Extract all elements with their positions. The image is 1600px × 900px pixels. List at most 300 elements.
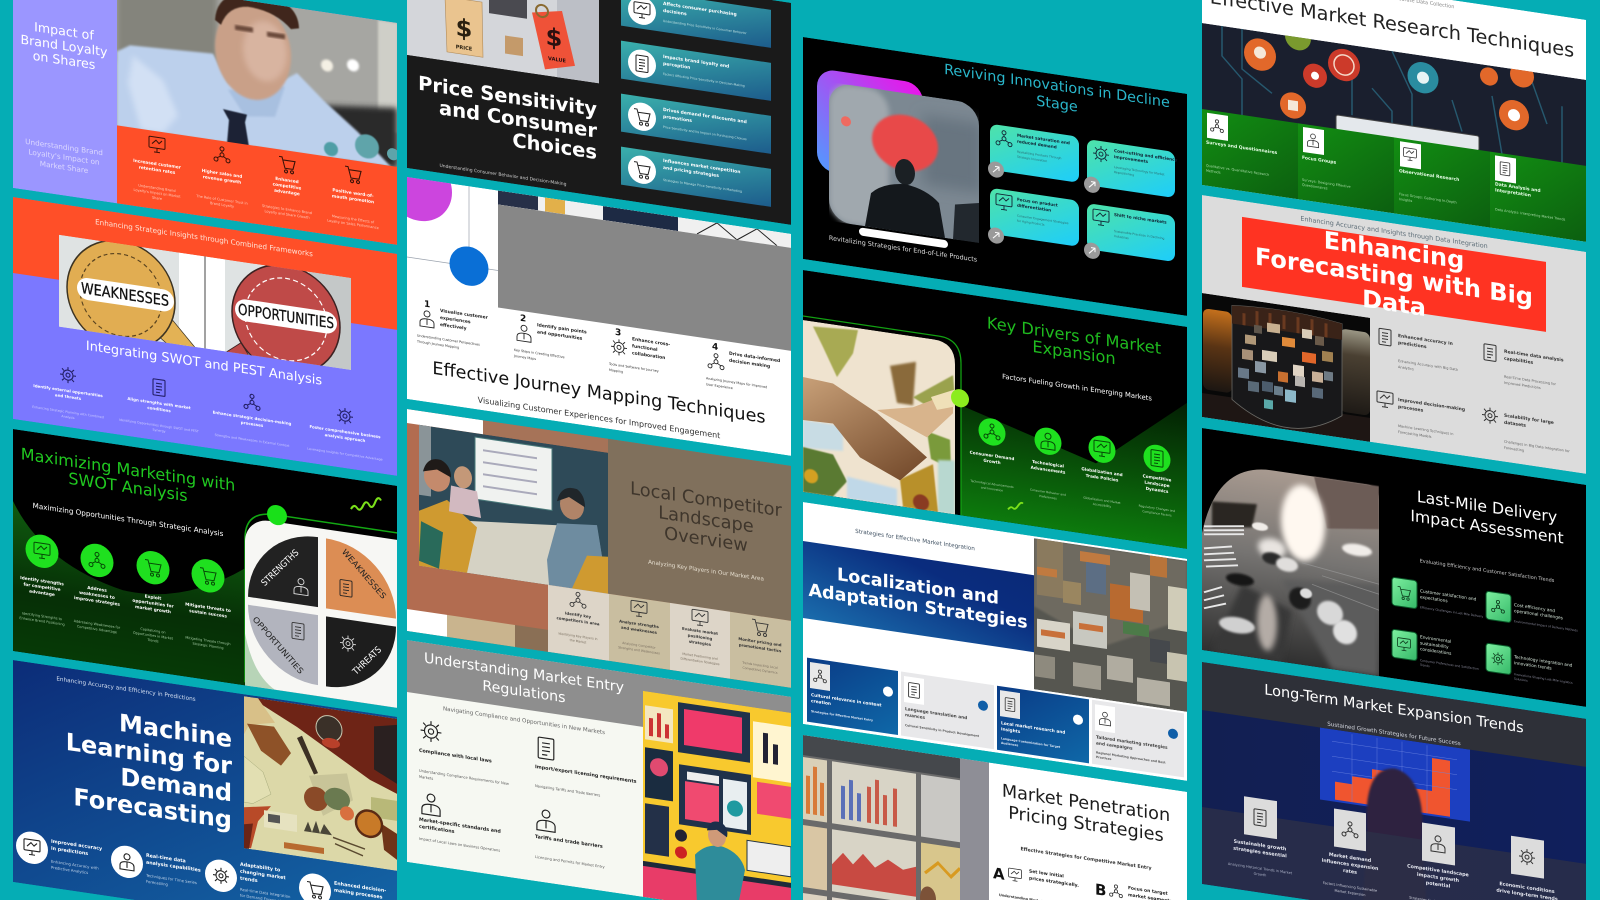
- image: woman viewing chart screen: [1320, 727, 1470, 900]
- card: tailored marketing: [1092, 700, 1184, 777]
- card: market competition: Influences market competition: [663, 159, 740, 175]
- item: globalization: Globalization and Market: [1083, 496, 1121, 505]
- slide: Local Competitor Landscape Overview: [407, 409, 791, 688]
- slide: Maximizing Marketing with SWOT Analysis: [13, 429, 397, 708]
- subtitle: Enhancing Accuracy and Insights through Data Integration: [1300, 215, 1488, 250]
- card: market saturation: reduced demand: [1017, 139, 1057, 150]
- item: customer satisfaction: expectations: [1420, 594, 1448, 604]
- item: technological advancements: [1030, 425, 1066, 502]
- card: identify competitors: Identifying Key Players in: [558, 631, 598, 641]
- item: market demand: Market demand: [1329, 853, 1371, 864]
- card: identify competitors: the Market: [570, 638, 587, 645]
- heading: Local Competitor: [630, 478, 782, 521]
- item: accuracy: [1379, 328, 1458, 378]
- card: purchasing decisions: Affects consumer purchasing: [663, 2, 737, 18]
- card: tailored marketing: and campaigns: [1096, 740, 1133, 752]
- item: identify strengths: [19, 531, 65, 627]
- card: market saturation: Market saturation and: [1017, 133, 1070, 145]
- step 1: Visualize customer: [440, 309, 488, 321]
- item: market demand: [1322, 807, 1379, 899]
- card: cultural relevance: Strategies for Effective Market Entry: [811, 709, 873, 722]
- item: comprehensive analysis: analysis approach: [325, 432, 366, 443]
- overlay: lower tint band: [1202, 807, 1586, 900]
- item: globalization: [1081, 433, 1123, 510]
- item: improved accuracy: Predictive Analytics: [51, 865, 88, 875]
- item: customer retention: Increased customer: [133, 159, 181, 171]
- item: standards: [419, 792, 501, 853]
- card: cost cutting: Repositioning: [1114, 170, 1134, 177]
- subtitle: Sustained Growth Strategies for Future Success: [1327, 722, 1461, 747]
- image: price and value tags: VALUE: [548, 56, 566, 65]
- card: niche markets: [1084, 203, 1175, 271]
- card: differentiation: [988, 187, 1079, 256]
- item: customer satisfaction: Efficiency Challenges in Last-Mile Delivery: [1420, 605, 1483, 619]
- item: competitive advantage: competitive: [273, 181, 301, 192]
- item: technology integration: innovation trends: [1514, 660, 1552, 672]
- card: market positioning: Differentiation Strategies: [680, 656, 720, 666]
- card: cultural relevance: Cultural relevance in content: [811, 693, 881, 709]
- card: niche markets: Industries: [1114, 234, 1129, 240]
- item: real-time data: [111, 846, 200, 886]
- item: real-time: Real-Time Data Processing for: [1504, 375, 1556, 386]
- item: market demand: influences expansion: [1322, 858, 1379, 872]
- item: technology integration: Solutions: [1514, 677, 1528, 683]
- item: adaptability: changing market: [240, 869, 286, 881]
- item: market demand: Factors Influencing Sustainable: [1323, 881, 1377, 893]
- item: address weaknesses: [74, 540, 121, 635]
- column: focus groups: Focus Groups: [1302, 155, 1336, 166]
- step 2: Journey Maps: [513, 354, 536, 361]
- accent: squiggle: [1008, 501, 1023, 512]
- item: competitive landscape: potential: [1426, 880, 1451, 890]
- item: consumer demand: [969, 415, 1014, 494]
- subtitle: Revitalizing Strategies for End-of-Life Products: [829, 234, 978, 264]
- image: price and value tags: [407, 0, 599, 84]
- accent: squiggle: [350, 497, 382, 511]
- image: charts on desk: [244, 696, 397, 871]
- card: market positioning: strategies: [689, 639, 712, 647]
- slide: Understanding Market Entry Regulations: [407, 640, 791, 900]
- heading: Impact of Brand Loyalty on Shares: Impact of: [34, 19, 94, 43]
- image: man facing glowing brain: [829, 84, 979, 243]
- item: decision making: [213, 394, 292, 447]
- card: analyze strengths: Analyze strengths: [619, 618, 659, 629]
- card: discounts: promotions: [663, 114, 692, 124]
- item: comprehensive analysis: [308, 408, 382, 461]
- slide: Last-Mile Delivery Impact Assessment: [1202, 428, 1586, 707]
- column: focus groups: [1298, 123, 1394, 213]
- slide: Effective Market Research Techniques: [1202, 0, 1586, 242]
- item: set low prices: Set low initial: [1029, 869, 1064, 880]
- item: licensing: [535, 737, 637, 803]
- item: technological advancements: Advancements: [1031, 465, 1066, 475]
- accent: blue circle: [450, 244, 488, 289]
- column: focus groups: Questionnaires: [1302, 183, 1328, 191]
- step 1: experiences: [440, 315, 471, 325]
- heading: Understanding Market Entry: [424, 651, 624, 696]
- slide: Integrating SWOT and PEST Analysis: [13, 197, 397, 476]
- item: improved accuracy: [16, 832, 102, 874]
- heading: Localization and: [837, 565, 999, 609]
- block: red title background: [1242, 217, 1546, 332]
- item: real-time data: Techniques for Time Series: [146, 873, 197, 885]
- step 4: Drive data-informed: [729, 352, 780, 364]
- card: local market research: Language Customization for Target: [1001, 736, 1060, 749]
- step 3: collaboration: [632, 350, 665, 361]
- item: cost efficiency: operational challenges: [1514, 608, 1564, 622]
- item: real-time: Improved Predictions: [1504, 381, 1541, 390]
- item: competitive advantage: advantage: [274, 188, 300, 197]
- card: identify competitors: competitors in area: [557, 615, 600, 627]
- image: patterned strip: [498, 190, 791, 248]
- subtitle: Factors Fueling Growth in Emerging Markets: [1002, 373, 1152, 403]
- item: customer retention: Share: [152, 196, 162, 201]
- item: address weaknesses: Address: [87, 586, 107, 594]
- band: dark title header: [1202, 662, 1586, 767]
- subtitle: Navigating Compliance and Opportunities in New Markets: [443, 706, 605, 736]
- item: customer retention: Loyalty's Impact on Market: [133, 188, 181, 199]
- item: consumer demand: and Innovation: [981, 485, 1003, 493]
- blocks: bottom colour strips: [407, 609, 548, 652]
- card: cost cutting: Cost-cutting and efficiency: [1114, 148, 1177, 162]
- column: data analysis: Data Analysis and: [1495, 182, 1541, 194]
- item: economic conditions: [1496, 834, 1558, 900]
- item: competitive dynamics: Landscape: [1144, 480, 1170, 488]
- item: environmental sustainability: considerations: [1420, 646, 1452, 657]
- step 1: Understanding Customer Perspectives: [417, 333, 480, 347]
- item: scalability: Challenges in Big Data Integration for: [1504, 440, 1570, 453]
- item: sales growth: Higher sales and: [202, 169, 242, 180]
- heading: Key Drivers of Market: [987, 313, 1161, 358]
- step 4: decision making: [729, 358, 770, 370]
- card: niche markets: Sustainable Practices in Declining: [1114, 229, 1164, 240]
- card: differentiation: for Aging Products: [1017, 219, 1045, 227]
- band: gray header: [407, 640, 791, 749]
- subtitle: Understanding Consumer Behavior and Decision-Making: [439, 163, 567, 188]
- step 2: Identify pain points: [537, 323, 587, 336]
- image: price and value tags: $: [456, 13, 472, 44]
- step 3: Tools and Software for Journey: [609, 362, 659, 373]
- step 1: 1: [424, 300, 430, 310]
- item: decision making: processes: [241, 420, 264, 428]
- step 1: [416, 298, 489, 354]
- subtitle: Analyzing Key Players in Our Market Area: [648, 560, 764, 583]
- column: data analysis: Interpretation: [1495, 187, 1531, 199]
- item: decision making: processes: [1398, 404, 1424, 414]
- heading: Impact of Brand Loyalty on Shares: on Shares: [33, 48, 95, 72]
- column: observational research: Focus Groups: Gathering In-Depth: [1399, 192, 1457, 205]
- item: address weaknesses: Addressing Weaknesses for: [74, 619, 120, 630]
- panel: SWOT wheel: STRENGTHS: [260, 548, 301, 589]
- subtitle: Maximizing Opportunities Through Strategic Analysis: [33, 501, 224, 538]
- item: sales growth: revenue growth: [203, 174, 241, 186]
- item: external opportunities: and threats: [55, 392, 82, 401]
- card: niche markets: Shift to niche markets: [1114, 212, 1167, 225]
- item: accuracy: Analytics: [1398, 365, 1414, 371]
- step 2: 2: [520, 314, 526, 325]
- heading: Expansion: [1032, 337, 1116, 368]
- subtitle: Evaluating Efficiency and Customer Satisfaction Trends: [1420, 558, 1555, 584]
- item: consumer demand: Growth: [983, 458, 1001, 465]
- item: identify strengths: Enhance Brand Positioning: [19, 616, 65, 627]
- item: standards: certifications: [419, 824, 455, 835]
- step 3: functional: [632, 343, 658, 353]
- heading: Effective Journey Mapping Techniques: [432, 359, 766, 428]
- item: target segments: Focus on target: [1128, 886, 1168, 897]
- image: analyst with dashboards: [643, 691, 791, 900]
- item: exploit opportunities: Capitalizing on: [140, 627, 166, 635]
- item: align strengths: conditions: [147, 405, 171, 413]
- subtitle: Understanding Brand: [25, 137, 103, 157]
- card: cost cutting: improvements: [1114, 154, 1149, 164]
- card: brand loyalty: Impacts brand loyalty and: [663, 55, 729, 70]
- item: set low prices: prices strategically.: [1029, 875, 1079, 889]
- item: real-time: Real-time data analysis: [1504, 350, 1564, 363]
- item: customer retention: [134, 136, 181, 200]
- item: customer satisfaction: Customer satisfaction and: [1420, 589, 1476, 603]
- item: adaptability: Adaptability to: [240, 863, 280, 874]
- background: green curve: [13, 501, 245, 685]
- card: local market research: [997, 686, 1089, 763]
- item: real-time data: analysis capabilities: [146, 860, 201, 874]
- item: technological advancements: Consumer Behavior and: [1030, 488, 1066, 497]
- item: sales growth: [195, 143, 248, 211]
- item: decision making: [1377, 391, 1465, 444]
- item: standards: Market-specific standards and: [419, 818, 501, 835]
- label: weaknesses: WEAKNESSES: [81, 279, 169, 310]
- panel: SWOT wheel: WEAKNESSES: [339, 548, 388, 601]
- slide: Price Sensitivity and Consumer Choices: [407, 0, 791, 225]
- image: team meeting: [419, 424, 608, 594]
- card: discounts: Drives demand for discounts and: [663, 108, 747, 125]
- card: tailored marketing: Practices: [1096, 755, 1112, 761]
- step 1: effectively: [440, 322, 467, 332]
- item: standards: Impact of Local Laws on Business Operations: [419, 837, 500, 853]
- heading: Impact of Brand Loyalty on Shares: Brand Loyalty: [20, 32, 108, 60]
- item: competitive dynamics: Dynamics: [1146, 486, 1169, 494]
- band: blue title: [803, 541, 1034, 652]
- card: pricing tactics: promotional tactics: [739, 642, 782, 653]
- heading: Integrating SWOT and PEST Analysis: [86, 339, 322, 389]
- item: economic conditions: Economic conditions: [1499, 882, 1555, 895]
- item: competitive dynamics: Regulatory Changes and: [1139, 504, 1175, 513]
- image: technology circuit icons: [1202, 23, 1586, 166]
- image: handshake over map: [803, 320, 955, 514]
- card: pricing tactics: Trends Impacting Local: [742, 661, 778, 670]
- heading: Pricing Strategies: [1008, 802, 1164, 846]
- item: competitive advantage: Enhanced: [275, 177, 299, 185]
- card: market competition: [621, 147, 771, 207]
- item: accuracy: Enhanced accuracy in: [1398, 334, 1453, 347]
- background: green wedge: [961, 369, 1187, 549]
- subtitle: Market Share: [40, 159, 89, 175]
- slide: Impact of Brand Loyalty on Shares: [13, 0, 399, 245]
- item: sustainable growth: [1228, 794, 1293, 881]
- item: sustainable growth: Analyzing Historical Trends in Market: [1228, 862, 1292, 875]
- item: external opportunities: [32, 367, 104, 419]
- card: analyze strengths: Analyzing Competitor: [622, 641, 656, 650]
- accent: purple circle: [386, 150, 452, 226]
- slide: Effective Journey Mapping Techniques: [386, 150, 791, 456]
- item: improved accuracy: in predictions: [51, 846, 88, 857]
- slide: Key Drivers of Market Expansion: [803, 270, 1187, 550]
- item: identify strengths: advantage: [29, 588, 55, 598]
- item: sustainable growth: Growth: [1254, 872, 1266, 878]
- item: accuracy: Enhancing Accuracy with Big Data: [1398, 359, 1458, 372]
- item: customer satisfaction: [1392, 577, 1483, 619]
- item: competitive dynamics: Competitive: [1143, 473, 1171, 483]
- item: mitigate threats: [185, 556, 231, 651]
- card: local market research: Local market research and: [1001, 721, 1065, 736]
- card: pricing tactics: [730, 612, 791, 688]
- item: sustainable growth: strategies essential: [1233, 846, 1287, 860]
- item: sales growth: The Role of Customer Trust in: [196, 194, 248, 206]
- item: licensing: Navigating Tariffs and Trade Barriers: [535, 784, 600, 798]
- card: discounts: [621, 94, 771, 154]
- item: identify strengths: Identify strengths: [20, 576, 64, 588]
- card: identify competitors: [548, 585, 609, 661]
- card: analyze strengths: Strengths and Weaknesses: [618, 645, 660, 655]
- item: decision making: Strengths and Weaknesses in External Context: [215, 433, 290, 448]
- item: exploit opportunities: [132, 548, 174, 646]
- item: decision making: Forecasting Models: [1398, 430, 1432, 439]
- item: technology integration: Innovations Shaping Last-Mile Logistics: [1514, 672, 1573, 685]
- heading: Regulations: [482, 678, 566, 706]
- accent: lime dot: [951, 388, 969, 409]
- item: licensing: Import/export licensing requirements: [535, 764, 637, 785]
- item: real-time data: Real-time data: [146, 854, 186, 865]
- item: globalization: Trade Policies: [1086, 473, 1119, 483]
- slide: Long-Term Market Expansion Trends: [1202, 662, 1586, 900]
- strip: gray column: [960, 758, 989, 900]
- card: tailored marketing: Regional Marketing Approaches and Best: [1096, 750, 1166, 765]
- item: address weaknesses: Competitive Advantage: [77, 624, 117, 634]
- item: tariffs: Tariffs and trade barriers: [535, 834, 603, 850]
- item: identify strengths: for competitive: [23, 582, 61, 593]
- heading: Choices: [512, 129, 597, 164]
- item: external opportunities: Identify external opportunities: [33, 383, 103, 398]
- panel: SWOT wheel: [244, 513, 397, 708]
- item: accuracy: predictions: [1398, 340, 1427, 350]
- step 4: [706, 341, 780, 397]
- panel: brown title area: [608, 439, 791, 621]
- card: language translation: Cultural Sensitivity in Product Development: [905, 723, 980, 738]
- item: comprehensive analysis: Foster comprehensive business: [309, 424, 381, 439]
- item: competitive landscape: impacts growth: [1417, 872, 1460, 884]
- card: language translation: nuances: [905, 713, 925, 721]
- item: competitive landscape: [1407, 820, 1470, 900]
- item: compliance: Markets: [419, 775, 433, 781]
- image: price and value tags: PRICE: [456, 44, 473, 53]
- item: exploit opportunities: market growth: [135, 604, 171, 615]
- item: scalability: Scalability for large: [1504, 414, 1554, 426]
- item: competitive advantage: Loyalty and Share Growth: [264, 209, 310, 220]
- accent: green dot: [267, 505, 287, 526]
- step 1: Through Journey Mapping: [416, 339, 459, 350]
- item: technological advancements: Preferences: [1039, 494, 1057, 501]
- item: improved accuracy: Enhancing Accuracy with: [51, 859, 99, 871]
- step 3: Enhance cross-: [632, 337, 670, 348]
- item: customer retention: Understanding Brand: [138, 184, 176, 193]
- card: pricing tactics: Monitor pricing and: [738, 636, 782, 647]
- item: mitigate threats: Mitigate threats to: [185, 602, 231, 614]
- item: scalability: [1482, 406, 1570, 460]
- band: orange benefits: [117, 125, 397, 245]
- item: external opportunities: Enhancing Strategic Planning with Combined: [32, 405, 104, 419]
- band: orange header: [13, 197, 397, 330]
- column: data analysis: Data Analysis: Interpreting Market Trends: [1495, 207, 1565, 222]
- item: adaptability: trends: [240, 876, 258, 884]
- slide: Enhancing Forecasting with Big Data: [1202, 195, 1586, 474]
- item: market demand: rates: [1343, 868, 1357, 876]
- card: market saturation: Revitalizing Products Through: [1017, 150, 1061, 160]
- item: exploit opportunities: Trends: [146, 638, 159, 644]
- card: purchasing decisions: Understanding Price Sensitivity in Consumer Behavior: [663, 19, 747, 35]
- heading: Last-Mile Delivery: [1417, 487, 1557, 527]
- item: environmental sustainability: sustainability: [1420, 640, 1449, 651]
- column: observational research: Insights: [1399, 197, 1412, 203]
- item: enhanced decisions: Enhanced decision-: [334, 882, 386, 894]
- card: purchasing decisions: [621, 0, 771, 48]
- heading: Data: [1362, 285, 1426, 322]
- item: target segments: B: [1095, 880, 1106, 900]
- heading: Overview: [664, 523, 748, 556]
- panel: SWOT wheel: THREATS: [350, 645, 384, 678]
- accent: gradient shape: [817, 68, 923, 186]
- subtitle: Enhancing Strategic Insights through Combined Frameworks: [95, 217, 313, 258]
- item: align strengths: Identifying Opportunities through SWOT and PEST: [119, 418, 199, 434]
- item: word of mouth: mouth promotion: [332, 193, 374, 205]
- item: competitive landscape: Competitive landscape: [1407, 864, 1469, 878]
- card: language translation: [901, 672, 994, 749]
- card: market positioning: positioning: [688, 633, 712, 641]
- card: analyze strengths: and weaknesses: [621, 625, 658, 635]
- heading: Reviving Innovations in Decline: [944, 62, 1170, 111]
- step 4: User Experience: [706, 382, 733, 390]
- step 2: [513, 313, 587, 369]
- card: differentiation: Focus on product: [1017, 197, 1058, 208]
- item: consumer demand: Technological Advancements: [970, 479, 1014, 489]
- heading: Forecasting: [73, 783, 232, 834]
- card: differentiation: Consumer Engagement Strategies: [1017, 214, 1068, 225]
- slide: Machine Learning for Demand Forecasting: [13, 660, 397, 900]
- heading: Machine: [119, 709, 232, 753]
- item: scalability: datasets: [1504, 420, 1526, 429]
- item: align strengths: [119, 378, 199, 433]
- item: address weaknesses: improve strategies: [74, 595, 120, 608]
- item: scalability: Forecasting: [1504, 446, 1524, 453]
- card: cultural relevance: [807, 658, 898, 735]
- heading: Price Sensitivity: [418, 72, 597, 121]
- item: cost efficiency: Cost efficiency and: [1514, 603, 1555, 614]
- item: exploit opportunities: Opportunities in Market: [133, 631, 174, 641]
- column: observational research: [1394, 137, 1490, 228]
- card: discounts: Price Sensitivity and Its Impact on Purchasing Choices: [663, 125, 747, 141]
- image: man viewing chart wall: [803, 735, 960, 900]
- item: cost efficiency: Environmental Impact of Delivery Methods: [1514, 619, 1578, 633]
- heading: Impact Assessment: [1410, 506, 1564, 548]
- item: competitive dynamics: [1139, 442, 1175, 518]
- decoration: guide lines: [407, 177, 499, 283]
- image placeholder: gray block: [498, 204, 791, 351]
- column: surveys: [1202, 109, 1298, 199]
- slide: Localization and Adaptation Strategies: [803, 502, 1187, 781]
- card: identify competitors: Identify key: [565, 610, 591, 619]
- item: competitive advantage: [262, 154, 312, 220]
- subtitle: Visualizing Customer Experiences for Improved Engagement: [478, 395, 720, 440]
- step 4: 4: [712, 342, 718, 353]
- item: environmental sustainability: [1392, 629, 1479, 675]
